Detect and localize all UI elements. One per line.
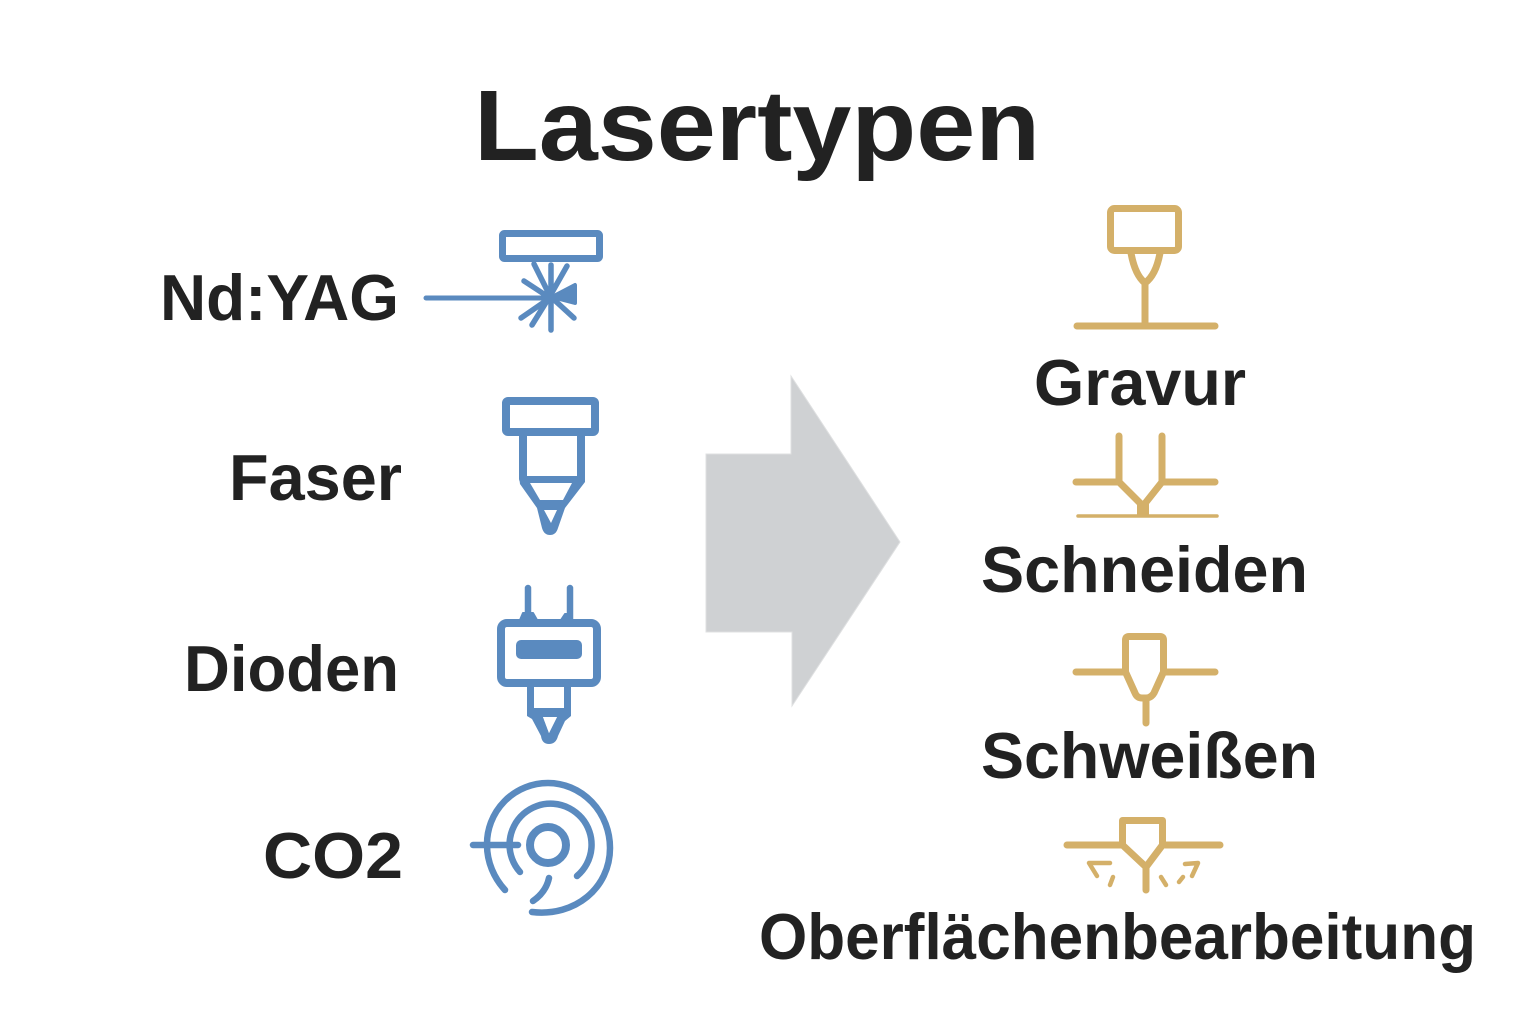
label: Faser: Faser — [229, 441, 402, 514]
icon: Nd:YAG laser — [426, 234, 600, 330]
label: Schneiden: Schneiden — [981, 533, 1308, 606]
label: CO2: CO2 — [263, 819, 403, 892]
icon: engraving — [1077, 208, 1215, 326]
icon: surface treatment — [1067, 820, 1220, 890]
label: Gravur: Gravur — [1034, 346, 1246, 419]
label: Dioden: Dioden — [184, 632, 399, 705]
arrow — [706, 376, 900, 706]
label: Schweißen: Schweißen — [981, 719, 1318, 792]
icon: welding — [1076, 636, 1215, 723]
label: Nd:YAG: Nd:YAG — [160, 261, 399, 334]
title: Lasertypen — [474, 70, 1040, 182]
icon: CO2 laser — [473, 783, 610, 913]
label: Oberflächenbearbeitung: Oberflächenbearbeitung — [759, 900, 1476, 973]
icon: cutting — [1076, 436, 1217, 516]
icon: fiber laser — [506, 401, 595, 535]
icon: diode laser — [501, 588, 597, 744]
